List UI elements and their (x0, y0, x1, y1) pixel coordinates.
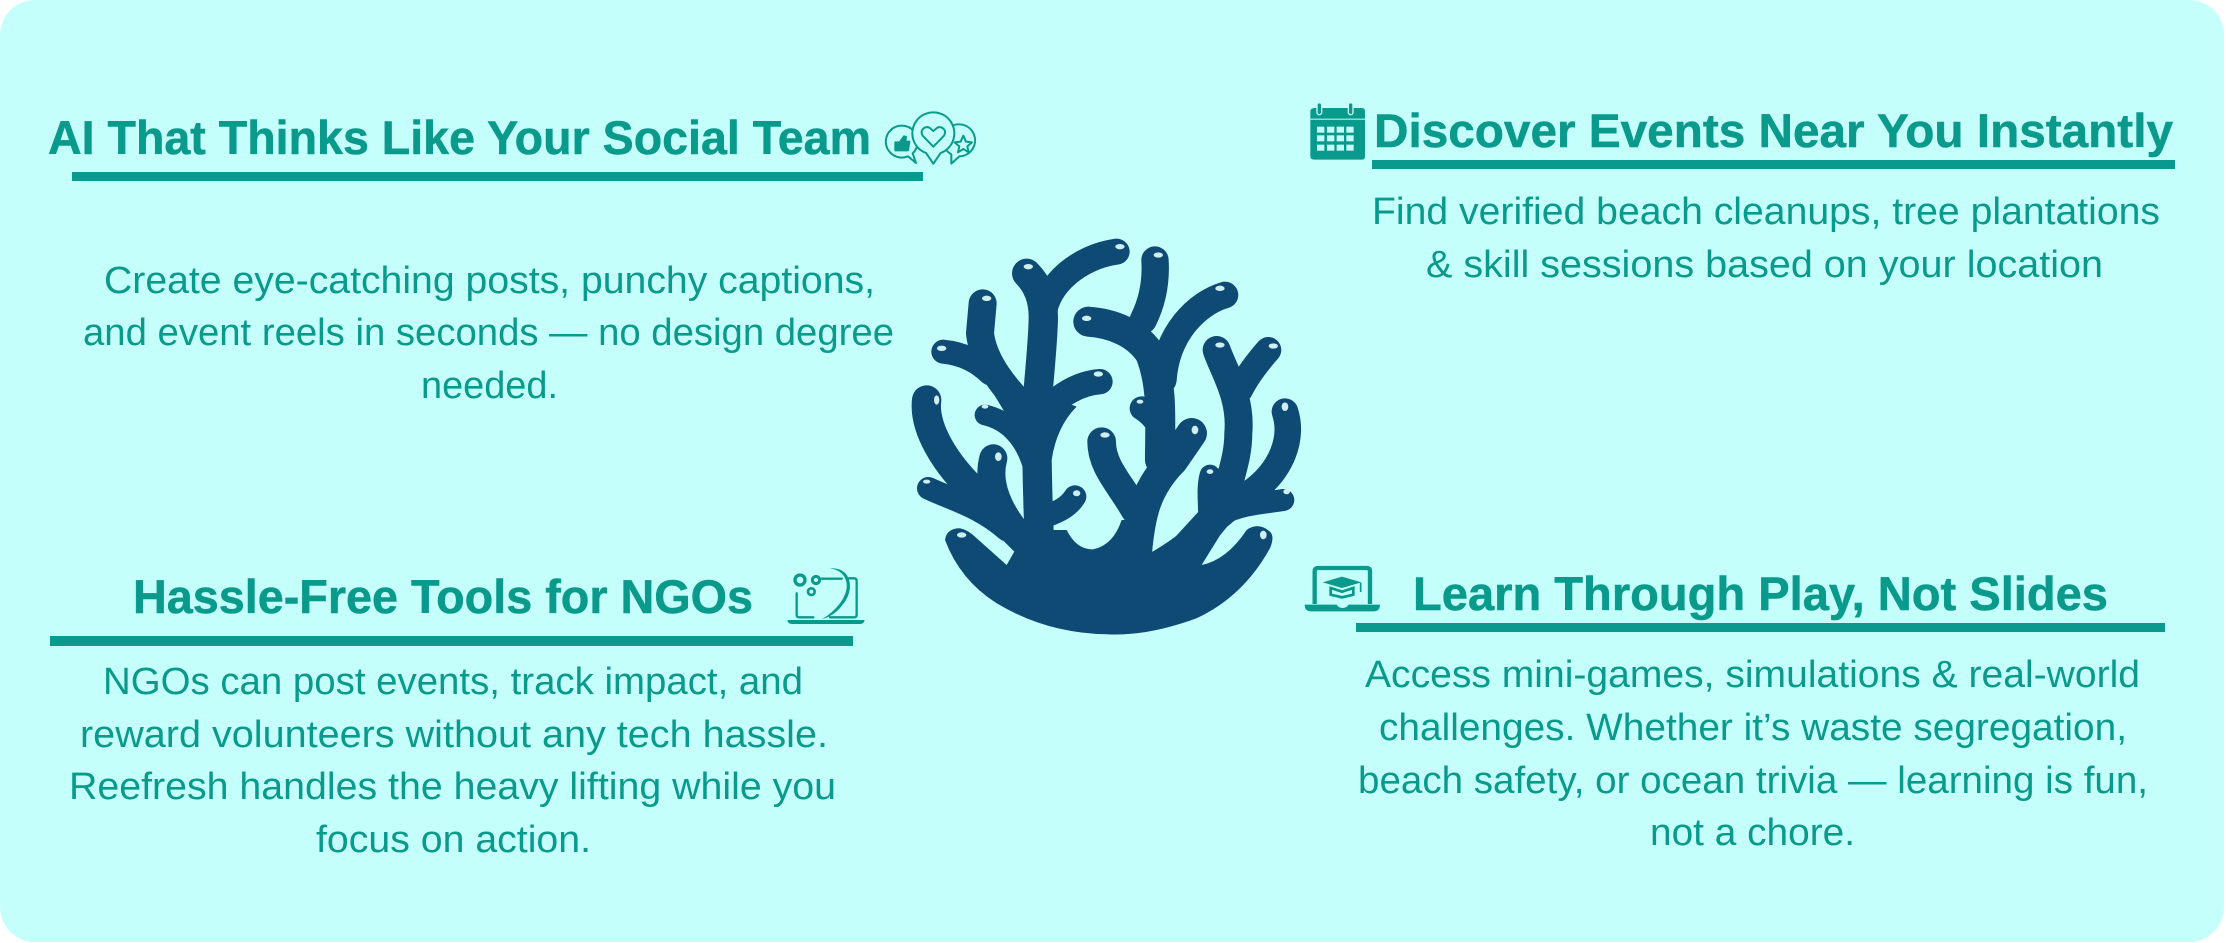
body text (69, 661, 836, 861)
panel: AI social team (48, 111, 975, 407)
body text: Reefresh handles the heavy lifting while you (69, 766, 836, 808)
heading: AI That Thinks Like Your Social Team: AI That Thinks Like Your Social Team (48, 111, 871, 164)
body text: and event reels in seconds — no design degree (83, 312, 894, 354)
body text: & skill sessions based on your location (1426, 244, 2103, 286)
coral highlights (923, 244, 1290, 539)
body text: Find verified beach cleanups, tree plantations (1372, 191, 2160, 233)
body text: challenges. Whether it’s waste segregation, (1379, 707, 2127, 749)
coral trunk junctions (993, 393, 1243, 530)
body text: needed. (421, 365, 558, 407)
icon: laptop with gears (787, 568, 865, 624)
body text: not a chore. (1650, 812, 1855, 854)
underline (1356, 623, 2165, 632)
panel: discover events (1310, 103, 2175, 286)
icon: central coral (923, 244, 1290, 635)
body text: beach safety, or ocean trivia — learning is fun, (1358, 760, 2148, 802)
icon: laptop with graduation cap (1305, 568, 1380, 611)
body text: NGOs can post events, track impact, and (103, 661, 803, 703)
body text: Create eye-catching posts, punchy captions, (104, 260, 875, 302)
underline (1372, 160, 2175, 169)
body text (83, 260, 894, 407)
heading: Hassle-Free Tools for NGOs: Hassle-Free Tools for NGOs (133, 570, 753, 623)
body text (1358, 654, 2148, 854)
heading: Discover Events Near You Instantly: Discover Events Near You Instantly (1374, 104, 2173, 157)
icon: calendar (1310, 103, 1365, 160)
underline (72, 172, 923, 181)
body text (1372, 191, 2160, 286)
panel: hassle-free tools (50, 568, 865, 861)
underline (50, 636, 853, 646)
icon: social reaction bubbles (886, 112, 975, 164)
body text: Access mini-games, simulations & real-world (1365, 654, 2140, 696)
body text: focus on action. (316, 819, 591, 861)
panel: learn through play (1305, 567, 2165, 854)
body text: reward volunteers without any tech hassle. (80, 714, 828, 756)
heading: Learn Through Play, Not Slides: Learn Through Play, Not Slides (1413, 567, 2108, 620)
coral base (945, 510, 1272, 635)
